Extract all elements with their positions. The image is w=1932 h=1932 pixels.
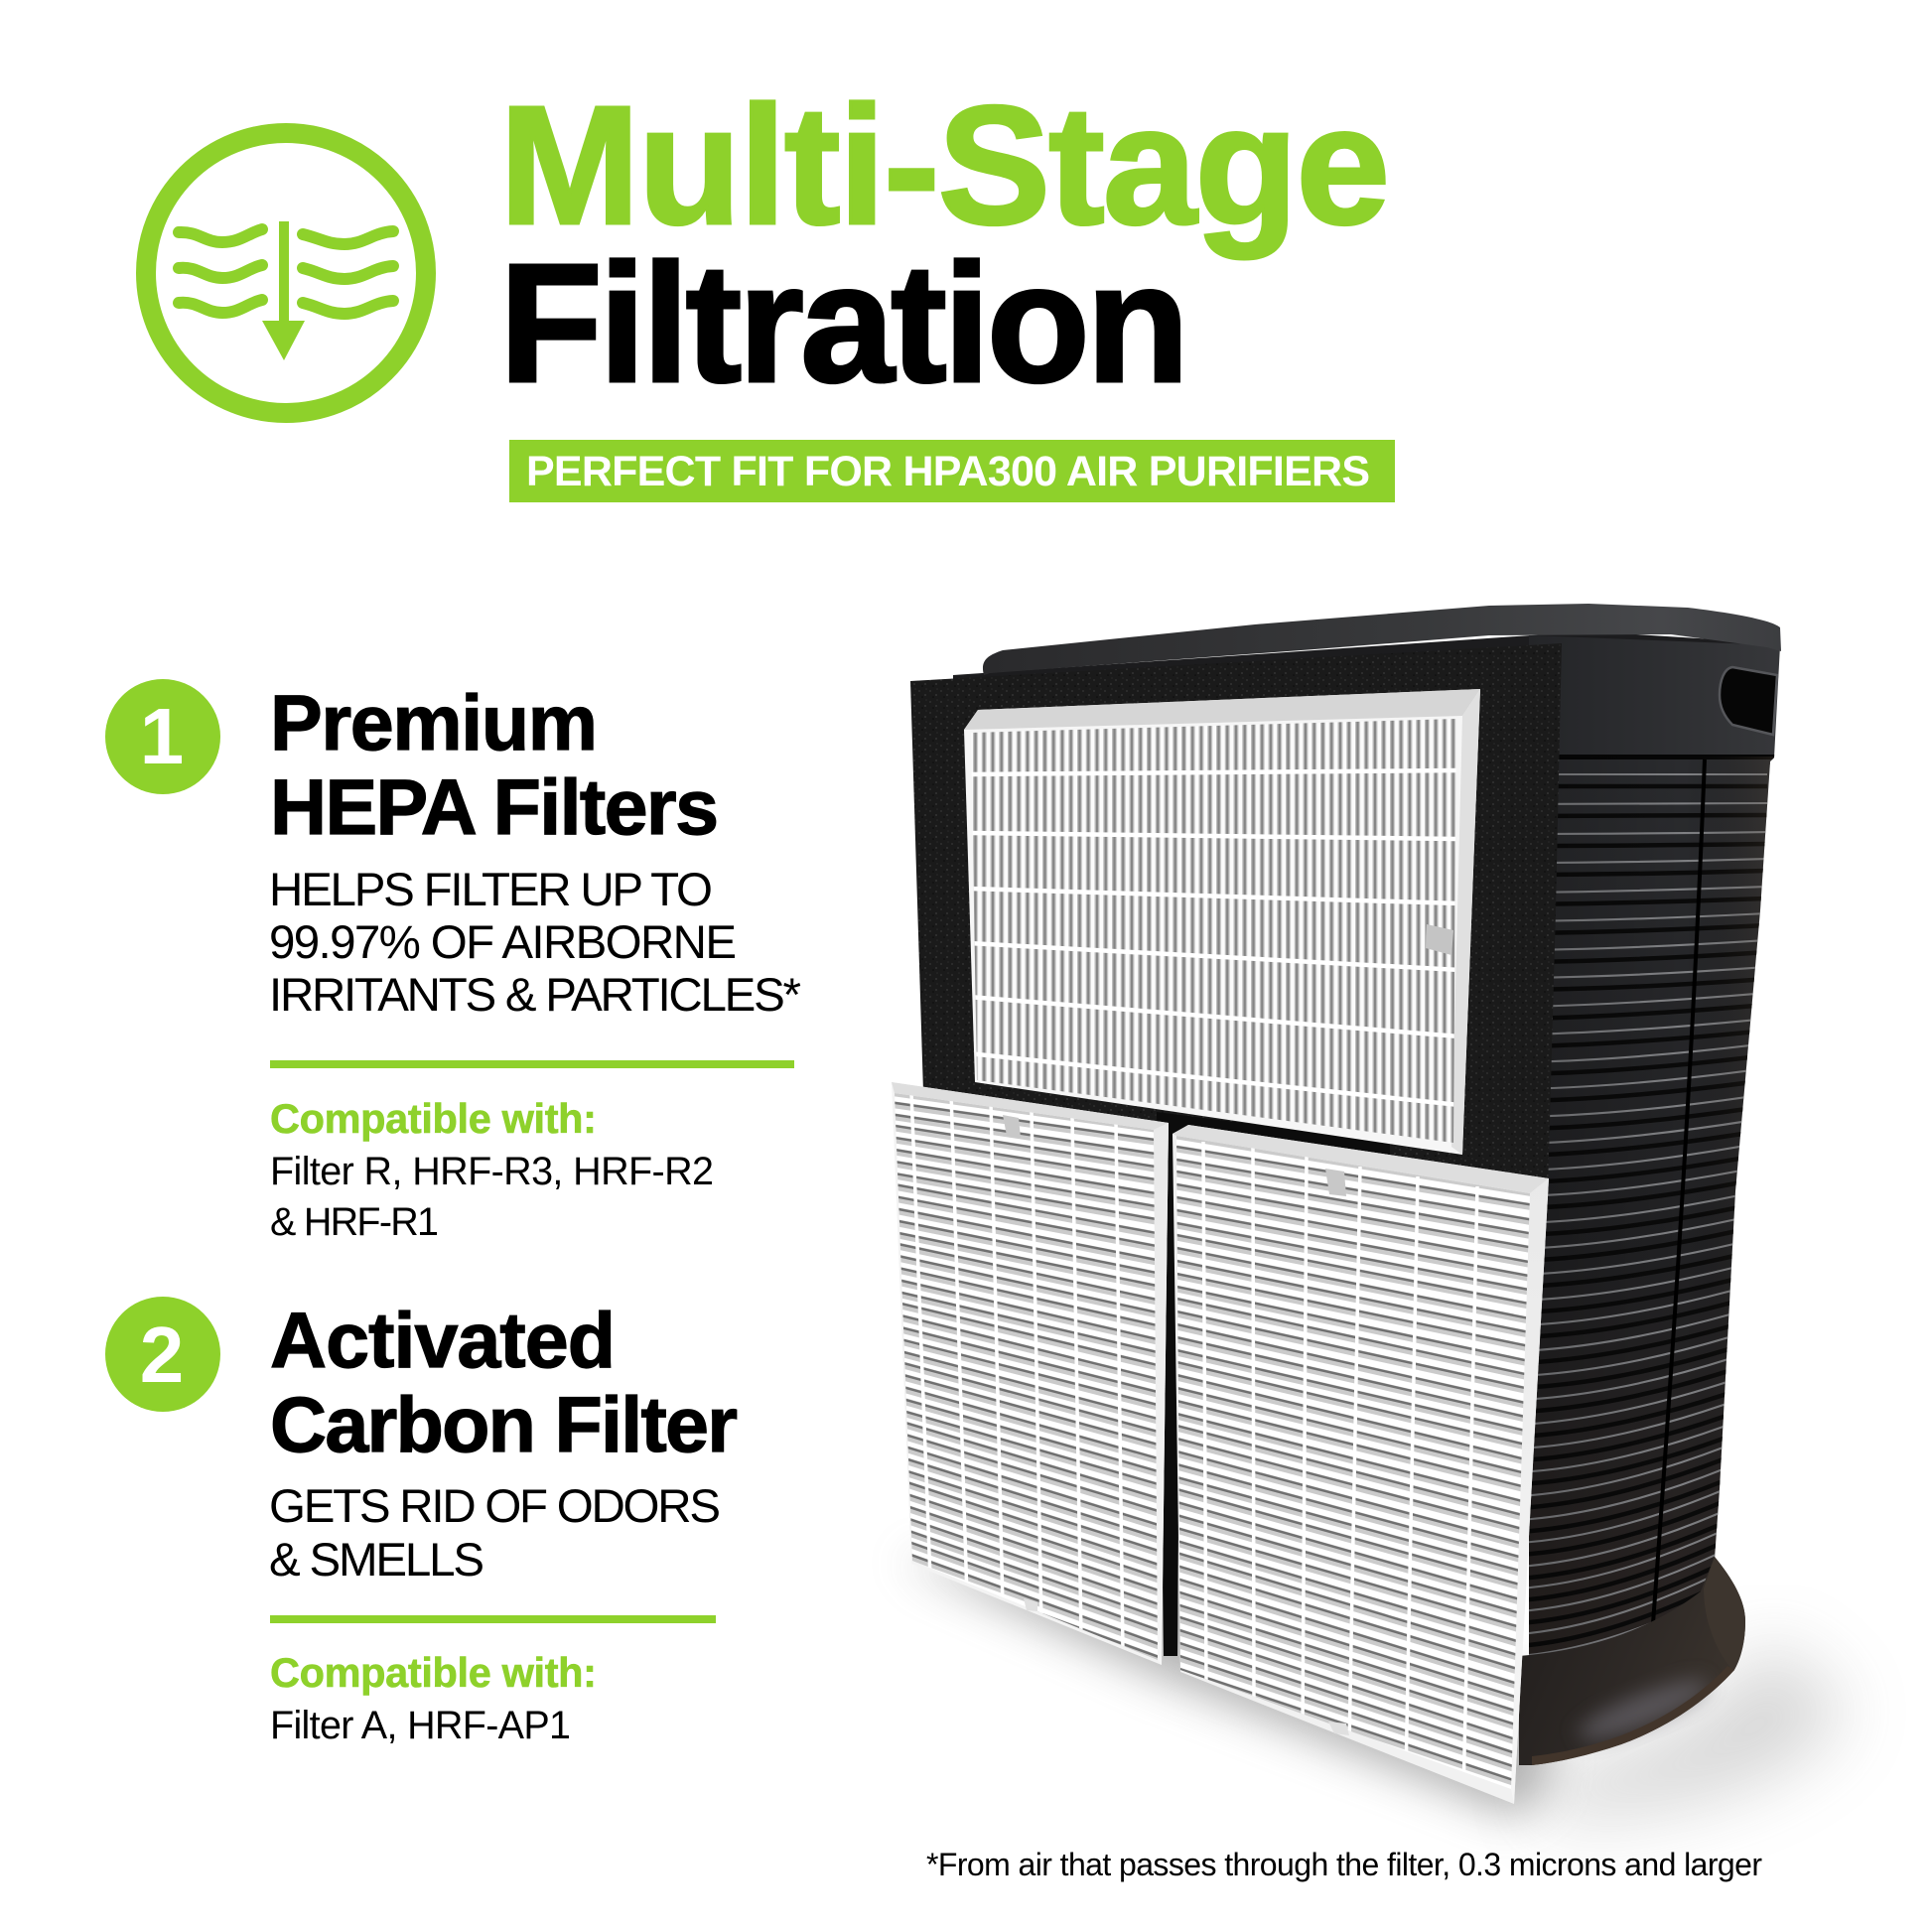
right carbon filter panel bbox=[1173, 1125, 1549, 1804]
text block: HEPA description: IRRITANTS & PARTICLES* bbox=[269, 969, 801, 1022]
heading: Activated Carbon Filter bbox=[270, 1296, 738, 1468]
ground shadow bbox=[898, 1559, 1847, 1817]
text block: carbon compatibility: Compatible with: bbox=[270, 1649, 597, 1696]
foam pre-filter sheet bbox=[910, 643, 1562, 1191]
title: Multi-Stage Filtration bbox=[499, 71, 1390, 418]
heading: Premium HEPA Filters bbox=[270, 678, 719, 851]
left carbon filter panel bbox=[889, 1082, 1169, 1665]
air purifier with filters bbox=[889, 604, 1847, 1817]
purifier lid bbox=[983, 604, 1781, 675]
text block: carbon description: & SMELLS bbox=[269, 1534, 484, 1587]
text block: carbon description: GETS RID OF ODORS bbox=[269, 1480, 721, 1533]
gap behind carbon panels bbox=[1157, 1112, 1390, 1656]
badge: number 1: 1 bbox=[140, 692, 184, 780]
text block: carbon compatibility: Filter A, HRF-AP1 bbox=[270, 1704, 571, 1747]
handle slot bbox=[1720, 667, 1777, 735]
title: Multi-Stage Filtration: Multi-Stage bbox=[499, 71, 1390, 260]
text block: HEPA compatibility: Compatible with: bbox=[270, 1095, 597, 1142]
text block: HEPA description: HELPS FILTER UP TO bbox=[269, 864, 713, 916]
text block: HEPA compatibility: & HRF-R1 bbox=[270, 1200, 439, 1244]
text block: carbon compatibility bbox=[270, 1649, 597, 1747]
icon: filtration circle with waves and arrow bbox=[146, 133, 426, 413]
text block: HEPA compatibility bbox=[270, 1095, 714, 1244]
text block: HEPA compatibility: Filter R, HRF-R3, HRF-R2 bbox=[270, 1150, 714, 1193]
heading: Premium HEPA Filters: Premium bbox=[270, 678, 598, 766]
panel: premium HEPA filters bbox=[105, 678, 801, 1244]
text block: HEPA description: 99.97% OF AIRBORNE bbox=[269, 916, 737, 969]
heading: Premium HEPA Filters: HEPA Filters bbox=[270, 762, 719, 851]
subtitle banner: PERFECT FIT FOR HPA300 AIR PURIFIERS bbox=[526, 448, 1370, 495]
badge: number 1 bbox=[105, 679, 220, 794]
badge: number 2 bbox=[105, 1297, 220, 1412]
text block: HEPA description bbox=[269, 864, 801, 1022]
HEPA filter bbox=[964, 689, 1480, 1155]
purifier body bbox=[953, 631, 1787, 1670]
footnote: *From air that passes through the filter, 0.3 microns and larger bbox=[926, 1847, 1762, 1882]
text block: carbon description bbox=[269, 1480, 721, 1587]
panel: activated carbon filter bbox=[105, 1296, 738, 1747]
heading: Activated Carbon Filter: Carbon Filter bbox=[270, 1380, 738, 1468]
badge: number 2: 2 bbox=[140, 1311, 184, 1399]
purifier base bbox=[1519, 1557, 1745, 1765]
heading: Activated Carbon Filter: Activated bbox=[270, 1296, 616, 1384]
title: Multi-Stage Filtration: Filtration bbox=[499, 229, 1189, 418]
